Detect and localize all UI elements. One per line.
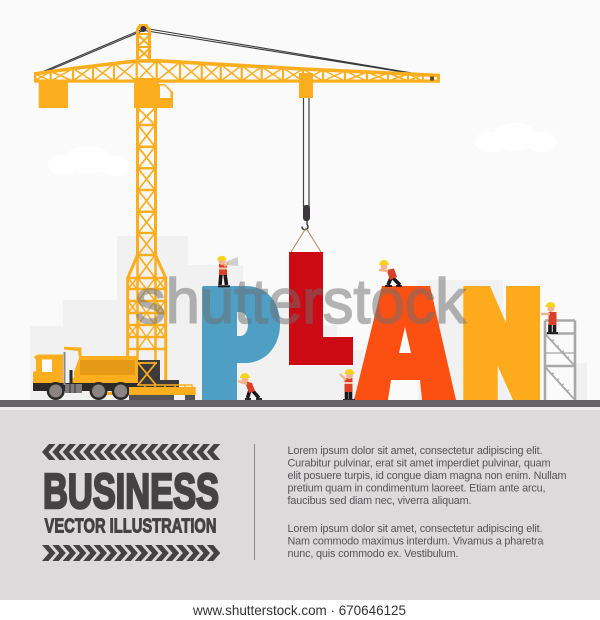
paragraph one: Curabitur pulvinar, erat sit amet imperdiet pulvinar, quam	[288, 458, 550, 470]
lifting ropes	[291, 228, 321, 252]
pivot	[140, 26, 146, 32]
counterweight	[39, 82, 68, 108]
paragraph one: Lorem ipsum dolor sit amet, consectetur adipiscing elit.	[288, 445, 542, 457]
scene background	[0, 0, 600, 408]
jib end detail	[430, 76, 434, 80]
paragraph one	[288, 445, 566, 507]
crane base dark block	[129, 360, 195, 400]
operator cabin	[134, 78, 173, 108]
worker on letter A	[379, 260, 402, 286]
exhaust pipe and strut	[64, 352, 66, 385]
dump truck	[33, 347, 138, 400]
crane jib	[34, 61, 440, 83]
hook	[302, 205, 310, 230]
paragraph two: nunc, quis commodo ex. Vestibulum.	[288, 548, 458, 560]
crane trolley	[299, 73, 313, 98]
footer strip	[0, 600, 600, 620]
worker with megaphone	[217, 256, 238, 286]
vertical divider	[254, 444, 255, 560]
letter N	[463, 286, 540, 400]
truck cab	[33, 354, 63, 385]
ground strip	[0, 400, 600, 407]
cloud right	[474, 123, 557, 152]
crane upper mast	[137, 26, 151, 61]
truck chassis	[33, 383, 138, 391]
paragraph two	[288, 523, 544, 560]
worker on scaffold	[541, 302, 558, 333]
paragraph one: elit posuere turpis, id congue diam magna non enim. Nullam	[288, 470, 566, 482]
heading BUSINESS: BUSINESS	[43, 464, 219, 519]
worker between L and A	[340, 369, 355, 400]
paragraph two: Nam commodo maximus interdum. Vivamus a pharetra	[288, 536, 544, 548]
crane lower mast	[127, 108, 166, 387]
chevron row bottom	[42, 545, 220, 561]
chevron row top	[42, 444, 220, 460]
letter P	[202, 286, 280, 400]
paragraph one: pretium quam in condimentum laoreet. Etiam ante arcu,	[288, 482, 546, 494]
paragraph two: Lorem ipsum dolor sit amet, consectetur adipiscing elit.	[288, 523, 542, 535]
letter L	[289, 252, 353, 365]
info panel	[0, 407, 600, 600]
subheading: VECTOR ILLUSTRATION	[44, 516, 216, 538]
watermark: shutterstock	[135, 267, 466, 337]
crane tie cables	[42, 28, 418, 74]
letter A	[354, 286, 456, 400]
paragraph one: faucibus sed diam nec, viverra aliquam.	[288, 495, 472, 507]
crane lattice over block	[137, 363, 157, 385]
footer url: www.shutterstock.com · 670646125	[192, 602, 406, 618]
crane base platform	[129, 385, 196, 395]
tower crane	[34, 26, 440, 387]
cloud left	[48, 146, 130, 176]
truck dump bed	[64, 347, 138, 384]
tool box	[65, 384, 82, 393]
background city buildings	[30, 236, 587, 400]
hoist cables	[304, 98, 309, 207]
rear bumper piece	[107, 392, 112, 395]
worker pushing letter P	[238, 373, 262, 399]
truck wheels	[47, 382, 130, 400]
scaffold	[545, 320, 575, 400]
